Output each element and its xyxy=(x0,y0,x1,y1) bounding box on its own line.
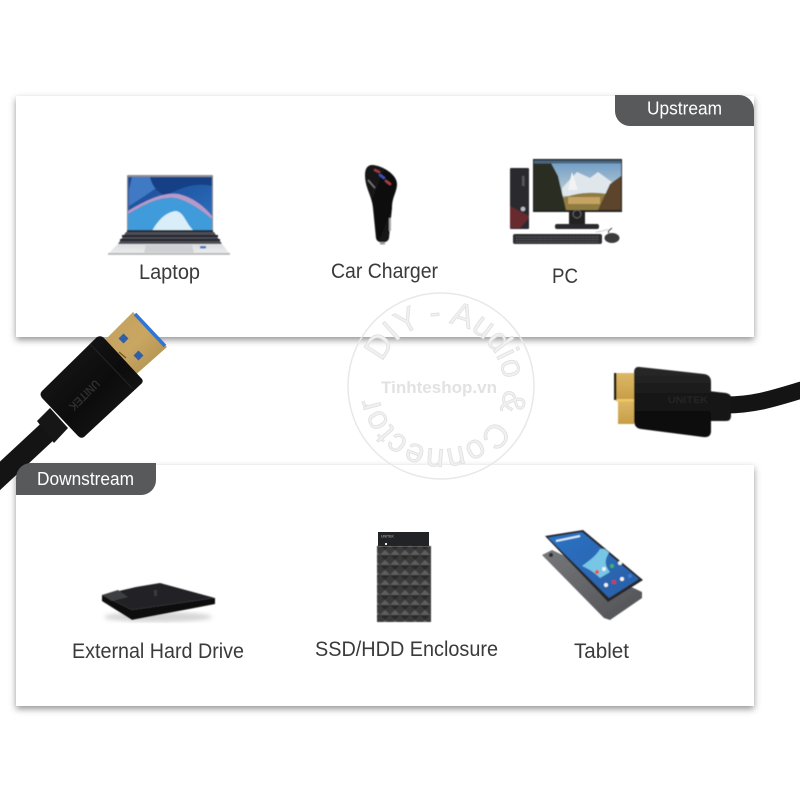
panel: downstream xyxy=(16,465,754,706)
text: tablet label: Tablet xyxy=(574,640,629,663)
text: car charger label: Car Charger xyxy=(331,260,438,283)
text: laptop label: Laptop xyxy=(139,261,200,284)
cable: USB-A to edge xyxy=(0,420,60,487)
icon: tablet xyxy=(542,530,643,620)
icon: laptop xyxy=(108,175,230,255)
icon: external hard drive xyxy=(102,583,215,622)
watermark: circular stamp: Tinhteshop.vn xyxy=(381,378,497,397)
connector: USB-A plug xyxy=(37,312,167,443)
text: enclosure label: SSD/HDD Enclosure xyxy=(315,638,498,661)
icon: SSD/HDD enclosure xyxy=(377,532,431,622)
connector: USB micro-B plug xyxy=(614,367,731,437)
tab: downstream xyxy=(16,463,156,495)
tab: upstream xyxy=(615,95,754,126)
icon: SSD/HDD enclosure: UNITEK xyxy=(381,534,394,538)
connector: USB micro-B plug: UNITEK xyxy=(668,395,709,405)
text: PC label: PC xyxy=(552,265,578,288)
text: external hard drive label: External Hard Drive xyxy=(72,640,244,663)
icon: desktop PC xyxy=(510,159,622,244)
cable: micro-B to edge xyxy=(726,389,800,405)
tab: downstream: Downstream xyxy=(37,469,134,489)
icon: car charger xyxy=(365,165,397,244)
connector: USB-A plug: UNITEK xyxy=(66,377,103,414)
watermark: circular stamp: DIY - Audio & Connector xyxy=(362,303,526,468)
panel: upstream xyxy=(16,96,754,337)
tab: upstream: Upstream xyxy=(647,98,722,118)
